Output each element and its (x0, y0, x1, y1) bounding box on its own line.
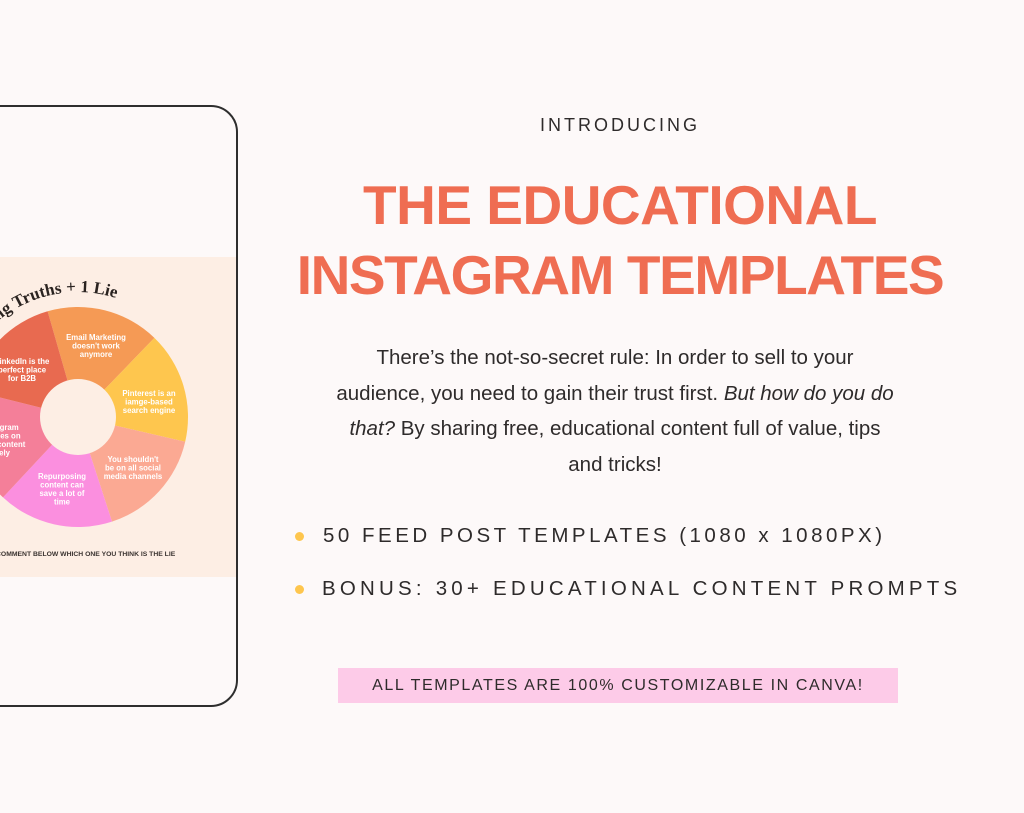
callout: customizable in canva: ALL TEMPLATES ARE 100% CUSTOMIZABLE IN CANVA! (372, 677, 864, 694)
description paragraph: and tricks! (568, 452, 662, 476)
device mockup with donut chart (0, 105, 238, 707)
donut chart: iamge-based (125, 398, 173, 406)
bullet 1: 50 FEED POST TEMPLATES (1080 x 1080PX) (323, 524, 886, 547)
donut chart: anymore (80, 350, 113, 359)
comment prompt: COMMENT BELOW WHICH ONE YOU THINK IS THE LIE (0, 551, 176, 558)
description paragraph: that? By sharing free, educational content full of value, tips (349, 417, 881, 440)
donut chart: save a lot of (39, 489, 85, 498)
donut chart: media channels (104, 472, 163, 481)
title (297, 174, 943, 306)
title: THE EDUCATIONAL (363, 174, 877, 236)
donut chart: content can (40, 480, 84, 490)
bullet 2: BONUS: 30+ EDUCATIONAL CONTENT PROMPTS (322, 577, 961, 600)
donut chart: doesn't work (72, 342, 121, 350)
donut chart (0, 281, 188, 556)
description paragraph: audience, you need to gain their trust first. But how do you do (336, 382, 894, 404)
title: INSTAGRAM TEMPLATES (297, 244, 943, 306)
bullet list (295, 524, 961, 600)
donut chart: be on all social (105, 464, 161, 472)
description paragraph (336, 346, 894, 476)
description paragraph: There’s the not-so-secret rule: In order to sell to your (376, 346, 854, 369)
device frame (0, 106, 237, 706)
donut chart: Email Marketing (66, 333, 126, 342)
donut chart: You shouldn't (107, 455, 159, 464)
donut chart: Repurposing (38, 472, 86, 481)
callout: customizable in canva (338, 668, 898, 703)
donut chart: for B2B (8, 374, 36, 383)
donut chart: time (54, 498, 71, 506)
donut chart: Pinterest is an (122, 389, 176, 398)
kicker: introducing: INTRODUCING (540, 115, 700, 135)
panel: post preview background (0, 257, 237, 577)
donut chart: search engine (123, 406, 176, 415)
